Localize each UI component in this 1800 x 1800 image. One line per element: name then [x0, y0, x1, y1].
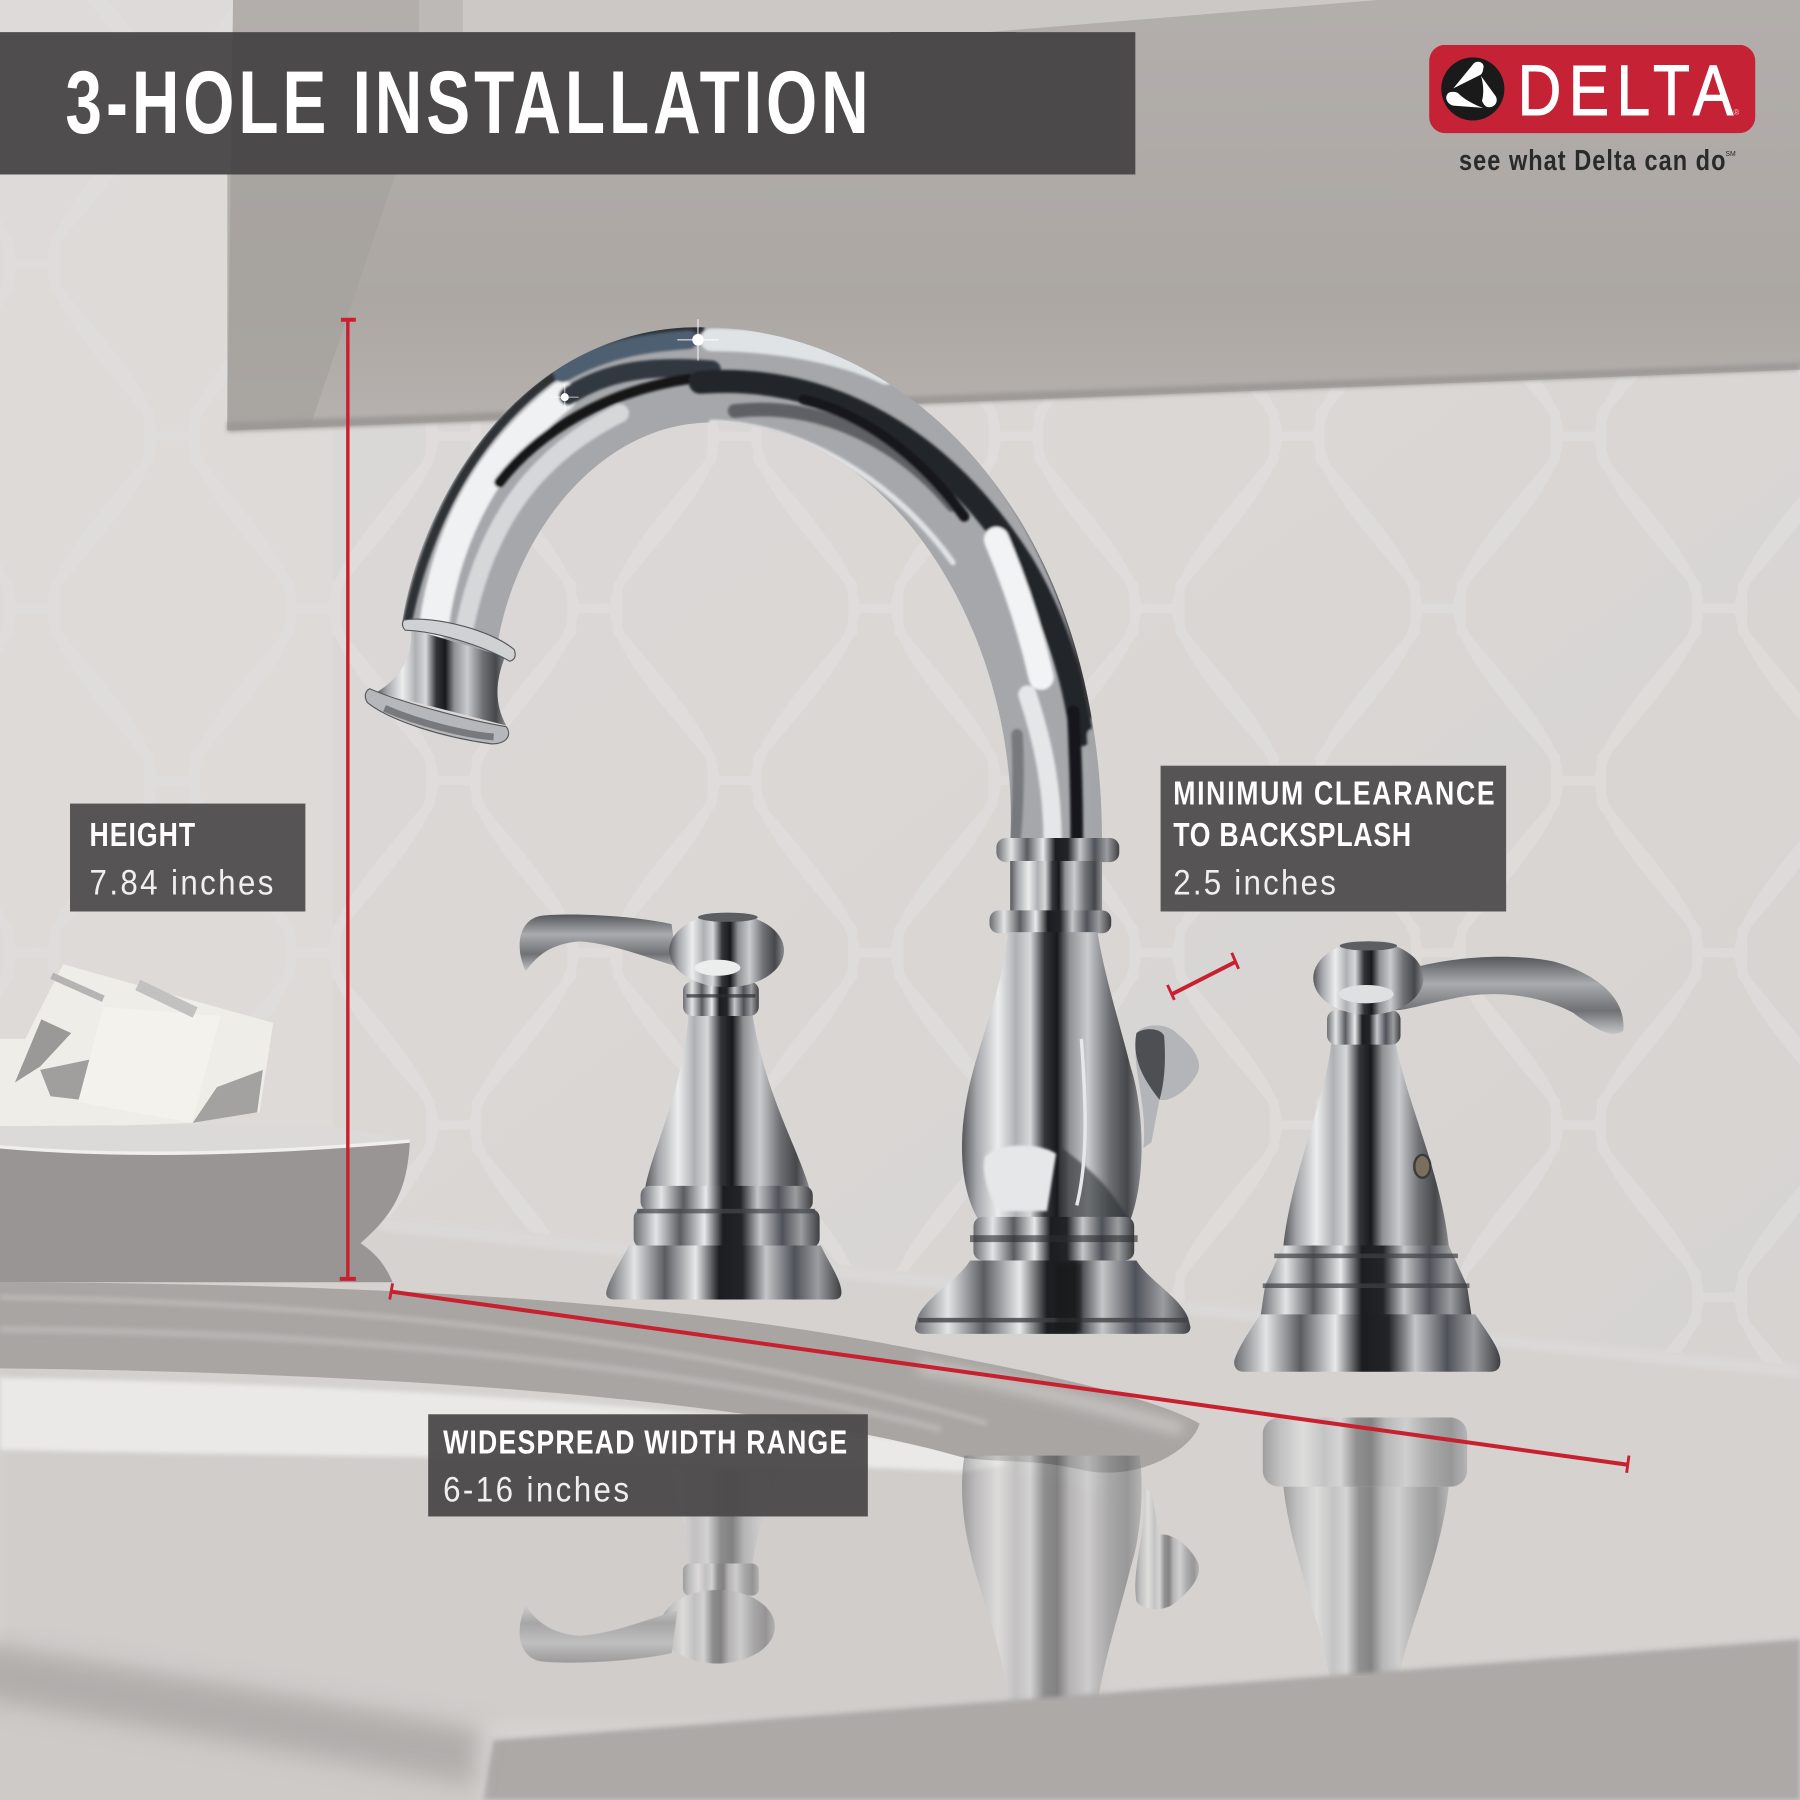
Delta logo — [1429, 45, 1755, 176]
left handle — [520, 913, 841, 1299]
wall background — [0, 0, 1800, 1378]
center faucet body — [915, 838, 1199, 1334]
lever — [1395, 957, 1624, 1034]
aerator tip — [365, 619, 515, 744]
width dimension line — [390, 1283, 1629, 1473]
callout: minimum clearance: 2.5 inches — [1173, 863, 1336, 903]
lever — [520, 915, 677, 971]
callout: height: HEIGHT — [90, 817, 196, 854]
height dimension line — [340, 319, 356, 1279]
callout: height — [70, 804, 305, 911]
Delta logo: SM — [1725, 151, 1736, 158]
reflections of the faucet in the counter — [520, 1389, 1467, 1702]
Delta logo: ® — [1733, 108, 1739, 117]
soap dish with wrapped soap — [0, 964, 410, 1282]
range hood above the faucet — [227, 0, 1800, 432]
callout: minimum clearance — [1161, 766, 1506, 911]
callout: widespread width range: 6-16 inches — [443, 1471, 629, 1510]
Delta logo: DELTA — [1518, 50, 1733, 130]
sink bowl and basin — [0, 1282, 1200, 1722]
faucet spout — [365, 310, 1125, 861]
callout: minimum clearance: TO BACKSPLASH — [1173, 817, 1411, 854]
set screw hole — [1414, 1155, 1430, 1178]
wrapped soap bar — [0, 964, 273, 1131]
title: 3-HOLE INSTALLATION — [65, 52, 869, 153]
callout: widespread width range: WIDESPREAD WIDTH RANGE — [443, 1425, 847, 1461]
countertop — [0, 1217, 1800, 1800]
logo mark — [1441, 57, 1504, 121]
callout: height: 7.84 inches — [90, 863, 273, 903]
title bar — [0, 32, 1135, 174]
callout: widespread width range — [428, 1414, 868, 1516]
glints on spout — [551, 319, 719, 411]
counter front edge — [0, 1639, 1800, 1800]
callout: minimum clearance: MINIMUM CLEARANCE — [1173, 776, 1495, 812]
tagline: see what Delta can do — [1459, 144, 1725, 176]
right handle — [1234, 941, 1624, 1372]
pop-up drain knob — [1135, 1025, 1199, 1148]
clearance dimension line — [1167, 953, 1239, 1000]
